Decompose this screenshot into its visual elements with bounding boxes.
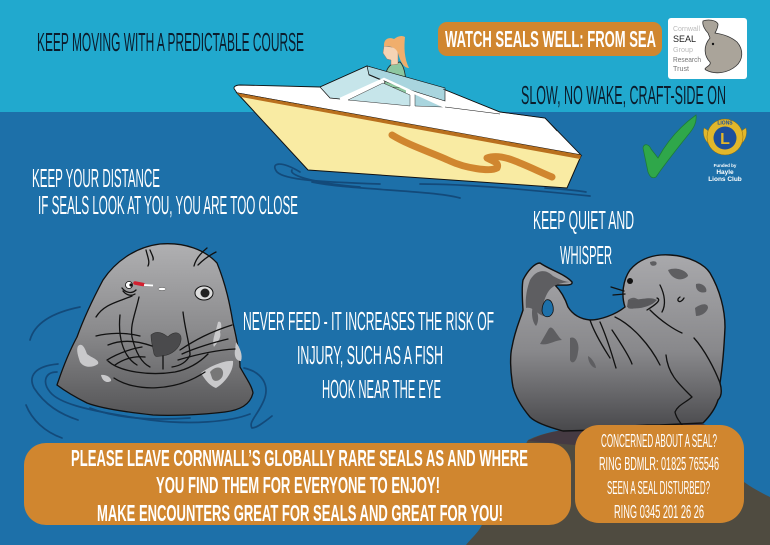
logo: Lions club: Hayle — [716, 169, 734, 176]
seal body creases — [590, 285, 720, 425]
text: KEEP QUIET AND — [533, 205, 634, 235]
logo: Lions club — [703, 119, 747, 183]
fishing hook — [96, 283, 166, 317]
seal on rock — [511, 255, 725, 431]
text: keep quiet: WHISPER — [560, 240, 612, 270]
icon: green tick — [643, 115, 696, 178]
text: keep your distance — [32, 163, 298, 220]
seal head markings — [77, 322, 242, 388]
boat deck — [234, 66, 581, 155]
logo: Lions club: Lions Club — [708, 176, 742, 183]
seal nose — [151, 332, 181, 356]
logo: Cornwall Seal Group Research Trust: Research — [673, 55, 701, 64]
logo: Cornwall Seal Group Research Trust: SEAL — [673, 34, 696, 45]
water ripples around seal head — [26, 307, 272, 438]
whiskers and mouth — [96, 248, 235, 388]
rock — [466, 423, 770, 545]
logo: Cornwall Seal Group Research Trust: Trust — [673, 64, 690, 73]
boat windscreen — [320, 66, 557, 131]
text: keep your distance: KEEP YOUR DISTANCE — [32, 163, 160, 193]
logo: Cornwall Seal Group Research Trust: Group — [673, 45, 693, 54]
text: never feed: HOOK NEAR THE EYE — [322, 374, 441, 404]
logo: Lions club: Funded by — [714, 163, 737, 168]
message panel: YOU FIND THEM FOR EVERYONE TO ENJOY! — [156, 472, 440, 498]
message panel — [24, 443, 571, 526]
text: KEEP MOVING WITH A PREDICTABLE COURSE — [37, 27, 304, 57]
logo: Cornwall Seal Group Research Trust — [668, 18, 747, 79]
boat hull — [237, 93, 581, 188]
text: IF SEALS LOOK AT YOU, YOU ARE TOO CLOSE — [38, 190, 298, 220]
logo: Lions club: LIONS — [717, 120, 733, 126]
logo: Lions club: L — [720, 131, 730, 148]
seal eyes — [122, 282, 213, 300]
contact panel — [575, 425, 744, 523]
seal markings — [526, 261, 708, 368]
wake ripples — [275, 164, 590, 198]
title badge — [438, 22, 662, 56]
boat with woman — [234, 36, 581, 188]
sea background — [0, 112, 770, 545]
seal head with hook injury — [57, 244, 253, 415]
text: never feed — [243, 306, 494, 404]
text: keep quiet — [533, 205, 634, 270]
seal face — [611, 278, 657, 308]
flipper hole showing sea — [542, 300, 553, 317]
text: never feed: INJURY, SUCH AS A FISH — [297, 340, 443, 370]
woman — [383, 36, 409, 88]
sky background — [0, 0, 770, 112]
text: NEVER FEED - IT INCREASES THE RISK OF — [243, 306, 494, 336]
logo: Cornwall Seal Group Research Trust: Cornwall — [673, 24, 700, 33]
